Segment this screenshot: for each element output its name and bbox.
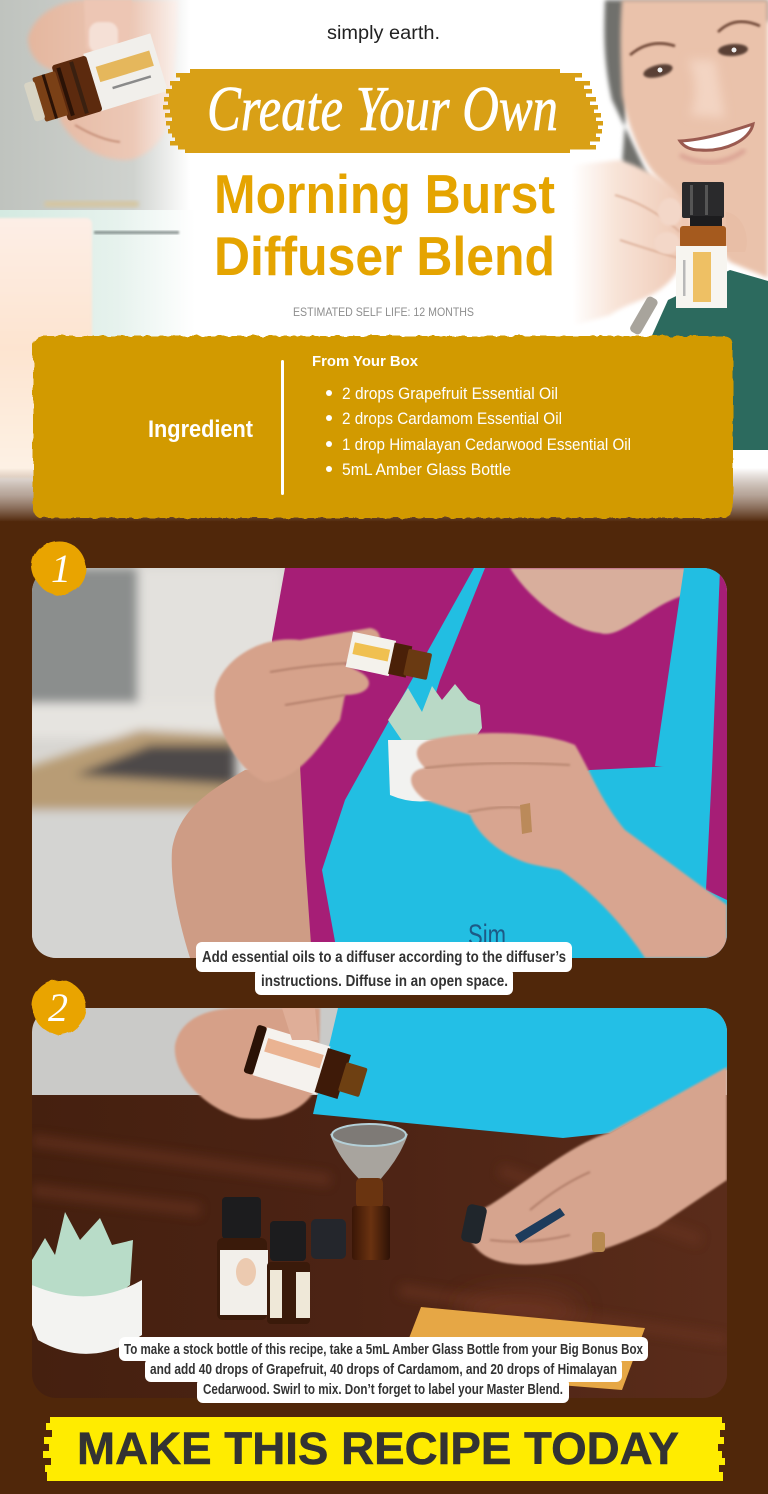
cap held in fingers	[460, 1203, 488, 1245]
ingredient list	[326, 384, 631, 479]
ring	[592, 1232, 605, 1252]
caption: step 1	[196, 942, 572, 995]
logo: simply earth.	[327, 23, 440, 44]
bottle in left hand	[20, 33, 168, 131]
succulent diffuser	[32, 1212, 142, 1354]
caption: step 2	[119, 1337, 648, 1403]
call to action banner	[43, 1417, 725, 1481]
photo: step 2	[32, 1008, 727, 1400]
funnel on amber bottle	[330, 1124, 408, 1260]
title: Morning Burst	[214, 163, 555, 225]
magenta shirt	[272, 568, 727, 958]
hand with grapefruit bottle	[175, 1008, 371, 1119]
step 2 badge: 2	[48, 985, 68, 1030]
succulent diffuser	[388, 684, 482, 802]
panel: ingredients	[33, 336, 733, 518]
divider	[281, 360, 284, 495]
ingredient list: 1 drop Himalayan Cedarwood Essential Oil	[342, 435, 631, 454]
call to action banner: MAKE THIS RECIPE TODAY	[77, 1423, 679, 1474]
eyes	[642, 62, 674, 80]
brush banner: create your own	[163, 69, 603, 153]
shelf life note: ESTIMATED SELF LIFE: 12 MONTHS	[293, 305, 474, 319]
caption: step 2: To make a stock bottle of this recipe, take a 5mL Amber Glass Bottle from your Big Bonus Box	[124, 1342, 643, 1358]
caption: step 1: Add essential oils to a diffuser according to the diffuser’s	[202, 949, 566, 966]
caption: step 2: Cedarwood. Swirl to mix. Don’t forget to label your Master Blend.	[203, 1382, 563, 1398]
step 1 badge: 1	[51, 546, 71, 591]
face	[620, 0, 768, 278]
apron logo text: Sim	[468, 919, 506, 952]
ingredient list: 5mL Amber Glass Bottle	[342, 460, 511, 479]
title	[214, 163, 555, 287]
step 1 badge	[32, 541, 86, 595]
photo: smiling woman holding bottle, top right	[572, 0, 768, 340]
title: Diffuser Blend	[214, 225, 555, 287]
ingredient list: 2 drops Cardamom Essential Oil	[342, 409, 562, 428]
hand	[572, 160, 695, 325]
step 2 badge	[32, 980, 86, 1035]
brush banner: create your own: Create Your Own	[207, 73, 558, 144]
neck	[510, 568, 690, 634]
ingredient heading: Ingredient	[148, 416, 253, 443]
blue apron	[322, 568, 727, 958]
caption: step 2: and add 40 drops of Grapefruit, 40 drops of Cardamom, and 20 drops of Himalayan	[150, 1362, 617, 1378]
bottle being tipped	[346, 632, 433, 684]
caption: step 1: instructions. Diffuse in an open space.	[261, 973, 508, 990]
recipe card	[396, 1307, 645, 1390]
from your box heading: From Your Box	[312, 353, 419, 370]
smile	[680, 124, 753, 150]
right forearm and hand	[469, 1067, 727, 1265]
blue shirt	[313, 1008, 727, 1138]
right hand and forearm	[411, 733, 727, 958]
bottle in right hand	[676, 182, 727, 308]
photo: step 1	[20, 568, 727, 960]
ingredient list: 2 drops Grapefruit Essential Oil	[342, 384, 558, 403]
essential oil bottles and cap	[217, 1197, 346, 1324]
sweater	[650, 270, 768, 340]
wedding ring	[520, 803, 532, 834]
photo: hand with bottle, top left	[20, 0, 178, 160]
hair	[604, 0, 768, 180]
left arm and hand	[172, 765, 312, 958]
hero photo background	[0, 0, 768, 522]
